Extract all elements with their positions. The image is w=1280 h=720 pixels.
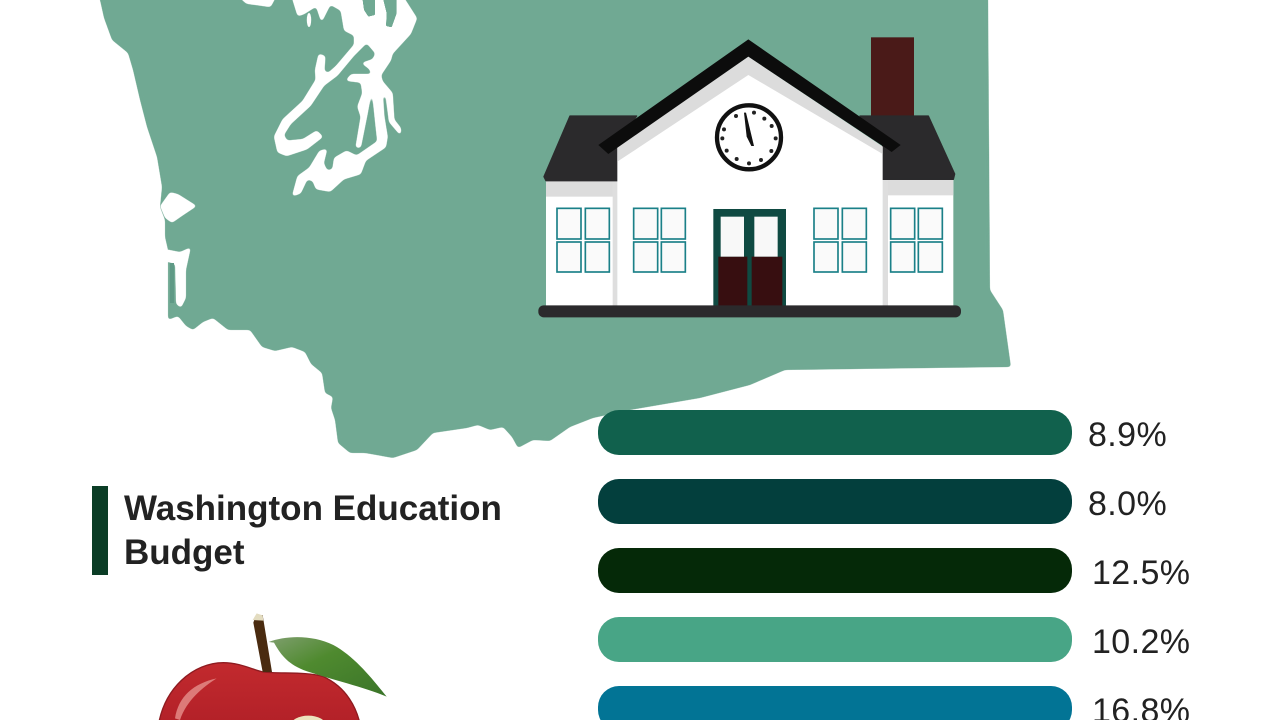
right wing	[860, 116, 955, 307]
apple highlight	[175, 678, 217, 720]
title accent bar	[92, 486, 108, 575]
title: Washington Education Budget	[124, 489, 502, 572]
bar: 16.8%	[598, 686, 1072, 720]
windows	[557, 208, 942, 272]
apple leaf	[269, 637, 387, 697]
map: coastal bays	[160, 192, 197, 308]
value: 8.9%: 8.9%	[1088, 416, 1167, 454]
bar: 12.5%	[598, 548, 1072, 593]
title: Washington Education Budget: Washington Education	[124, 489, 502, 528]
bar: 8.9%	[598, 410, 1072, 455]
main gable	[598, 39, 901, 307]
value: 10.2%: 10.2%	[1092, 623, 1190, 661]
icon: schoolhouse	[538, 37, 961, 317]
door	[713, 209, 786, 307]
bar: 10.2%	[598, 617, 1072, 662]
bar: 8.0%	[598, 479, 1072, 524]
map: Puget Sound	[237, 0, 416, 195]
left wing	[544, 116, 637, 307]
map: Puget Sound islands	[306, 0, 397, 27]
map: Washington state	[96, 0, 1011, 458]
apple stem	[253, 615, 272, 672]
value: 8.0%: 8.0%	[1088, 485, 1167, 523]
value: 12.5%: 12.5%	[1092, 554, 1190, 592]
foundation	[538, 305, 961, 317]
title: Washington Education Budget: Budget	[124, 533, 245, 572]
map: shoreline sliver	[170, 263, 174, 303]
map: small channel	[307, 13, 311, 27]
chimney	[871, 37, 914, 127]
icon: apple	[157, 613, 387, 720]
apple body	[157, 663, 362, 720]
clock	[717, 105, 781, 169]
apple bite	[291, 716, 326, 720]
bar chart: education budget shares	[598, 410, 1190, 720]
